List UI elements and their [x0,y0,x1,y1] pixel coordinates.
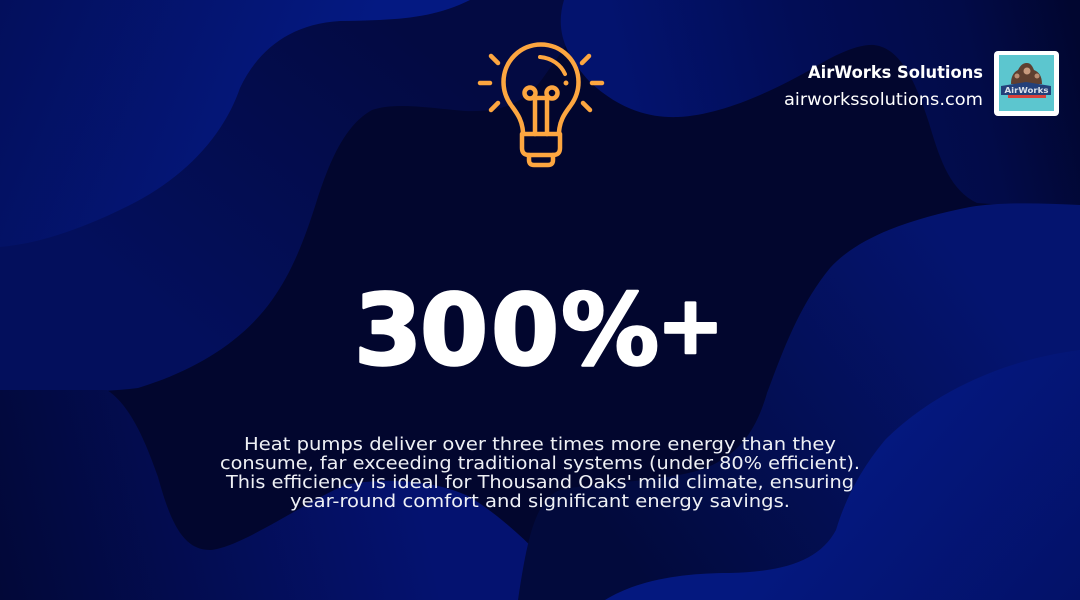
description text [220,434,860,512]
background blob: top right [561,0,1080,210]
background blob: right middle [518,203,1080,600]
icon: light bulb [480,45,602,165]
bulb base [522,134,560,155]
big number: % [561,274,659,388]
glass highlight [540,57,565,74]
bulb screw tip [529,155,553,165]
big number: 3 [354,274,422,388]
brand website: airworkssolutions.com [784,90,983,110]
background blob: bottom right front [605,350,1080,600]
logo [994,51,1059,116]
description text: This efficiency is ideal for Thousand Oaks' mild climate, ensuring [225,472,854,493]
logo: AirWorks [1004,86,1049,95]
background blob: top left front [0,0,470,247]
background blob: bottom left [0,390,540,600]
filaments [535,98,547,134]
description text: consume, far exceeding traditional systems (under 80% efficient). [220,453,860,474]
logo people [1011,63,1042,84]
background blob: upper left mid layer [0,0,570,392]
brand name: AirWorks Solutions [808,63,983,83]
big number: + [657,279,724,372]
description text: year-round comfort and significant energy savings. [290,491,790,512]
bulb outline [504,45,578,134]
big number: 0 [420,274,488,388]
big number: 0 [491,274,559,388]
rays [480,56,602,110]
logo badge [1001,82,1051,95]
description text: Heat pumps deliver over three times more energy than they [244,434,836,455]
